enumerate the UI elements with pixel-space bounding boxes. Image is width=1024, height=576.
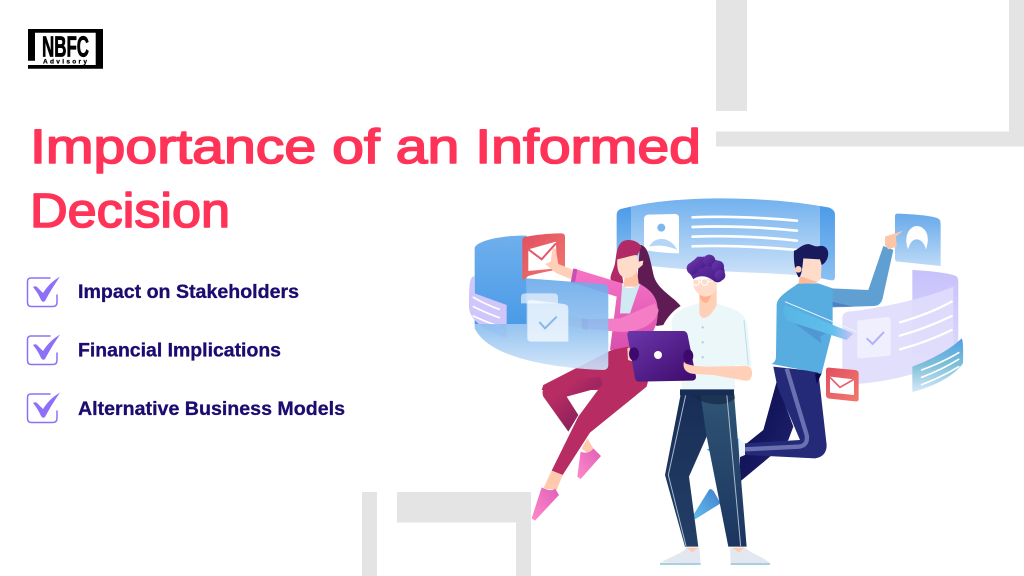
right man legs: [707, 367, 827, 482]
figure: man in centre: [627, 255, 770, 564]
illustration: top centre profile panel: [617, 198, 835, 280]
woman legs: [532, 370, 650, 521]
item: Alternative Business Models: Alternative Business Models: [78, 399, 345, 420]
right man torso and head: [772, 231, 903, 373]
centre man upper body: [627, 255, 752, 395]
illustration: small teal panel: [912, 338, 963, 392]
item: Financial Implications: Financial Implications: [78, 340, 281, 362]
logo: NBFC: [42, 32, 89, 64]
logo: [28, 29, 103, 69]
photo card: [644, 214, 679, 253]
logo: Advisory: [43, 59, 87, 66]
checklist: [28, 276, 345, 422]
item: Impact on Stakeholders: Impact on Stakeholders: [78, 282, 299, 303]
title: [30, 121, 701, 238]
item: Alternative Business Models: [28, 392, 345, 422]
icon: red envelope left: [522, 233, 565, 281]
illustration: translucent front panel: [475, 278, 608, 370]
document with check: [521, 293, 568, 342]
icon: red envelope right: [826, 368, 859, 401]
right man blue shoe: [693, 489, 721, 519]
text lines: [693, 217, 797, 250]
item: Financial Implications: [28, 334, 281, 364]
illustration: right lavender panel: [842, 270, 958, 385]
illustration: left panel back: [469, 236, 527, 338]
background frame: top right: [716, 0, 1024, 146]
centre man shoes: [660, 548, 770, 564]
title: Decision: [30, 185, 230, 238]
icon: profile card right: [895, 214, 941, 266]
centre man trousers: [660, 389, 770, 564]
curly hair: [687, 255, 725, 282]
title: Importance of an Informed: [30, 121, 701, 174]
figure: woman: [532, 240, 681, 521]
icon: tablet: [627, 331, 696, 382]
figure: man on right: [693, 231, 903, 519]
item: Impact on Stakeholders: [28, 276, 299, 306]
woman head and torso: [542, 240, 681, 390]
background frame: bottom: [362, 492, 531, 576]
